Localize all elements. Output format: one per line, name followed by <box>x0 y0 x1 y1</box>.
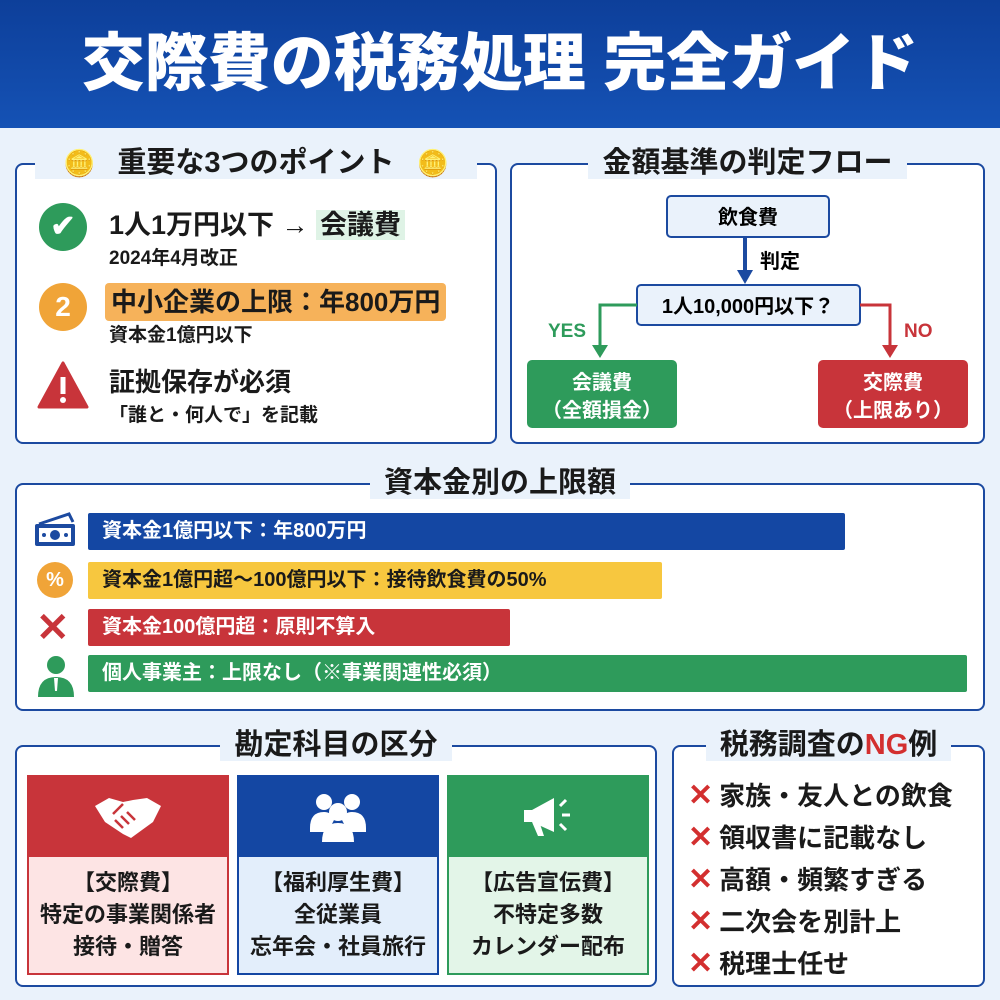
bar: 1億以下: 資本金1億円以下：年800万円 <box>102 520 366 542</box>
bar: 1億超 <box>88 562 662 599</box>
icon: check: ✔ <box>50 210 76 243</box>
heading: flow: 金額基準の判定フロー <box>602 147 892 179</box>
flow chart: 会議費 <box>572 371 632 394</box>
card: 福利厚生費 <box>237 775 439 975</box>
heading: accounts: 勘定科目の区分 <box>234 729 438 761</box>
card: 交際費: 接待・贈答 <box>73 934 183 959</box>
point 1: 1人1万円以下 → 会議費 <box>109 210 401 240</box>
NG list: ✕二次会を別計上 <box>688 905 901 938</box>
bar: 個人: 個人事業主：上限なし（※事業関連性必須） <box>102 662 502 684</box>
bar: 1億以下 <box>88 513 845 550</box>
icon: group <box>239 777 437 857</box>
heading: points: 🪙 重要な3つのポイント 🪙 <box>63 147 449 179</box>
card: 広告宣伝費: 不特定多数 <box>493 902 603 927</box>
flow chart: 飲食費 <box>718 206 778 229</box>
panel: accounts <box>15 745 657 987</box>
flow chart: （上限あり） <box>833 399 953 422</box>
card: 広告宣伝費 <box>447 775 649 975</box>
card: 福利厚生費: 全従業員 <box>294 902 382 927</box>
NG list: ✕家族・友人との飲食 <box>688 779 953 812</box>
point 1: 2024年4月改正 <box>109 248 238 269</box>
header <box>0 0 1000 128</box>
panel: limits <box>15 483 985 711</box>
panel: NG <box>672 745 985 987</box>
card: 福利厚生費: 【福利厚生費】 <box>261 870 415 895</box>
flow chart: NO <box>904 321 932 342</box>
point 3 <box>109 367 318 426</box>
header: 交際費の税務処理 完全ガイド <box>82 29 918 99</box>
card: 交際費: 【交際費】 <box>73 870 183 895</box>
flow chart: 1人10,000円以下？ <box>662 296 834 318</box>
NG list: ✕高額・頻繁すぎる <box>688 863 927 896</box>
icon: percent: % <box>46 569 64 591</box>
card: 福利厚生費: 忘年会・社員旅行 <box>250 934 426 959</box>
card: 広告宣伝費: カレンダー配布 <box>471 934 625 959</box>
flow chart: 交際費 <box>863 371 923 394</box>
icon: number 2 <box>39 283 87 331</box>
point 1 <box>109 210 405 269</box>
point 2 <box>105 283 446 346</box>
heading: limits: 資本金別の上限額 <box>384 467 616 499</box>
bar: 個人 <box>88 655 967 692</box>
heading: NG: 税務調査のNG例 <box>720 729 937 761</box>
panel: flow <box>510 163 985 444</box>
NG list: ✕領収書に記載なし <box>688 821 927 854</box>
NG list <box>688 779 953 980</box>
icon: warning <box>38 361 89 408</box>
icon: money <box>35 512 75 546</box>
card: 交際費 <box>27 775 229 975</box>
icon: megaphone <box>449 777 647 857</box>
panel: points <box>15 163 497 444</box>
icon: person <box>38 656 74 697</box>
point 2: 中小企業の上限：年800万円 <box>111 287 440 317</box>
flow chart: YES <box>548 321 586 342</box>
icon: handshake <box>29 777 227 857</box>
point 3: 証拠保存が必須 <box>109 367 291 397</box>
icon: percent <box>37 562 73 598</box>
card: 広告宣伝費: 【広告宣伝費】 <box>471 870 625 895</box>
NG list: ✕税理士任せ <box>688 947 849 980</box>
point 2: 資本金1億円以下 <box>109 325 253 346</box>
point 3: 「誰と・何人で」を記載 <box>109 405 318 426</box>
icon: number 2: 2 <box>55 291 71 322</box>
flow chart: 判定 <box>760 250 800 273</box>
card: 交際費: 特定の事業関係者 <box>40 902 216 927</box>
icon: check <box>39 203 87 251</box>
flow chart <box>527 195 968 428</box>
bar: 100億超: 資本金100億円超：原則不算入 <box>102 616 375 638</box>
icon: cross: ✕ <box>36 606 70 650</box>
bar: 1億超: 資本金1億円超〜100億円以下：接待飲食費の50% <box>102 569 547 591</box>
flow chart: （全額損金） <box>542 399 662 422</box>
bar: 100億超 <box>88 609 510 646</box>
